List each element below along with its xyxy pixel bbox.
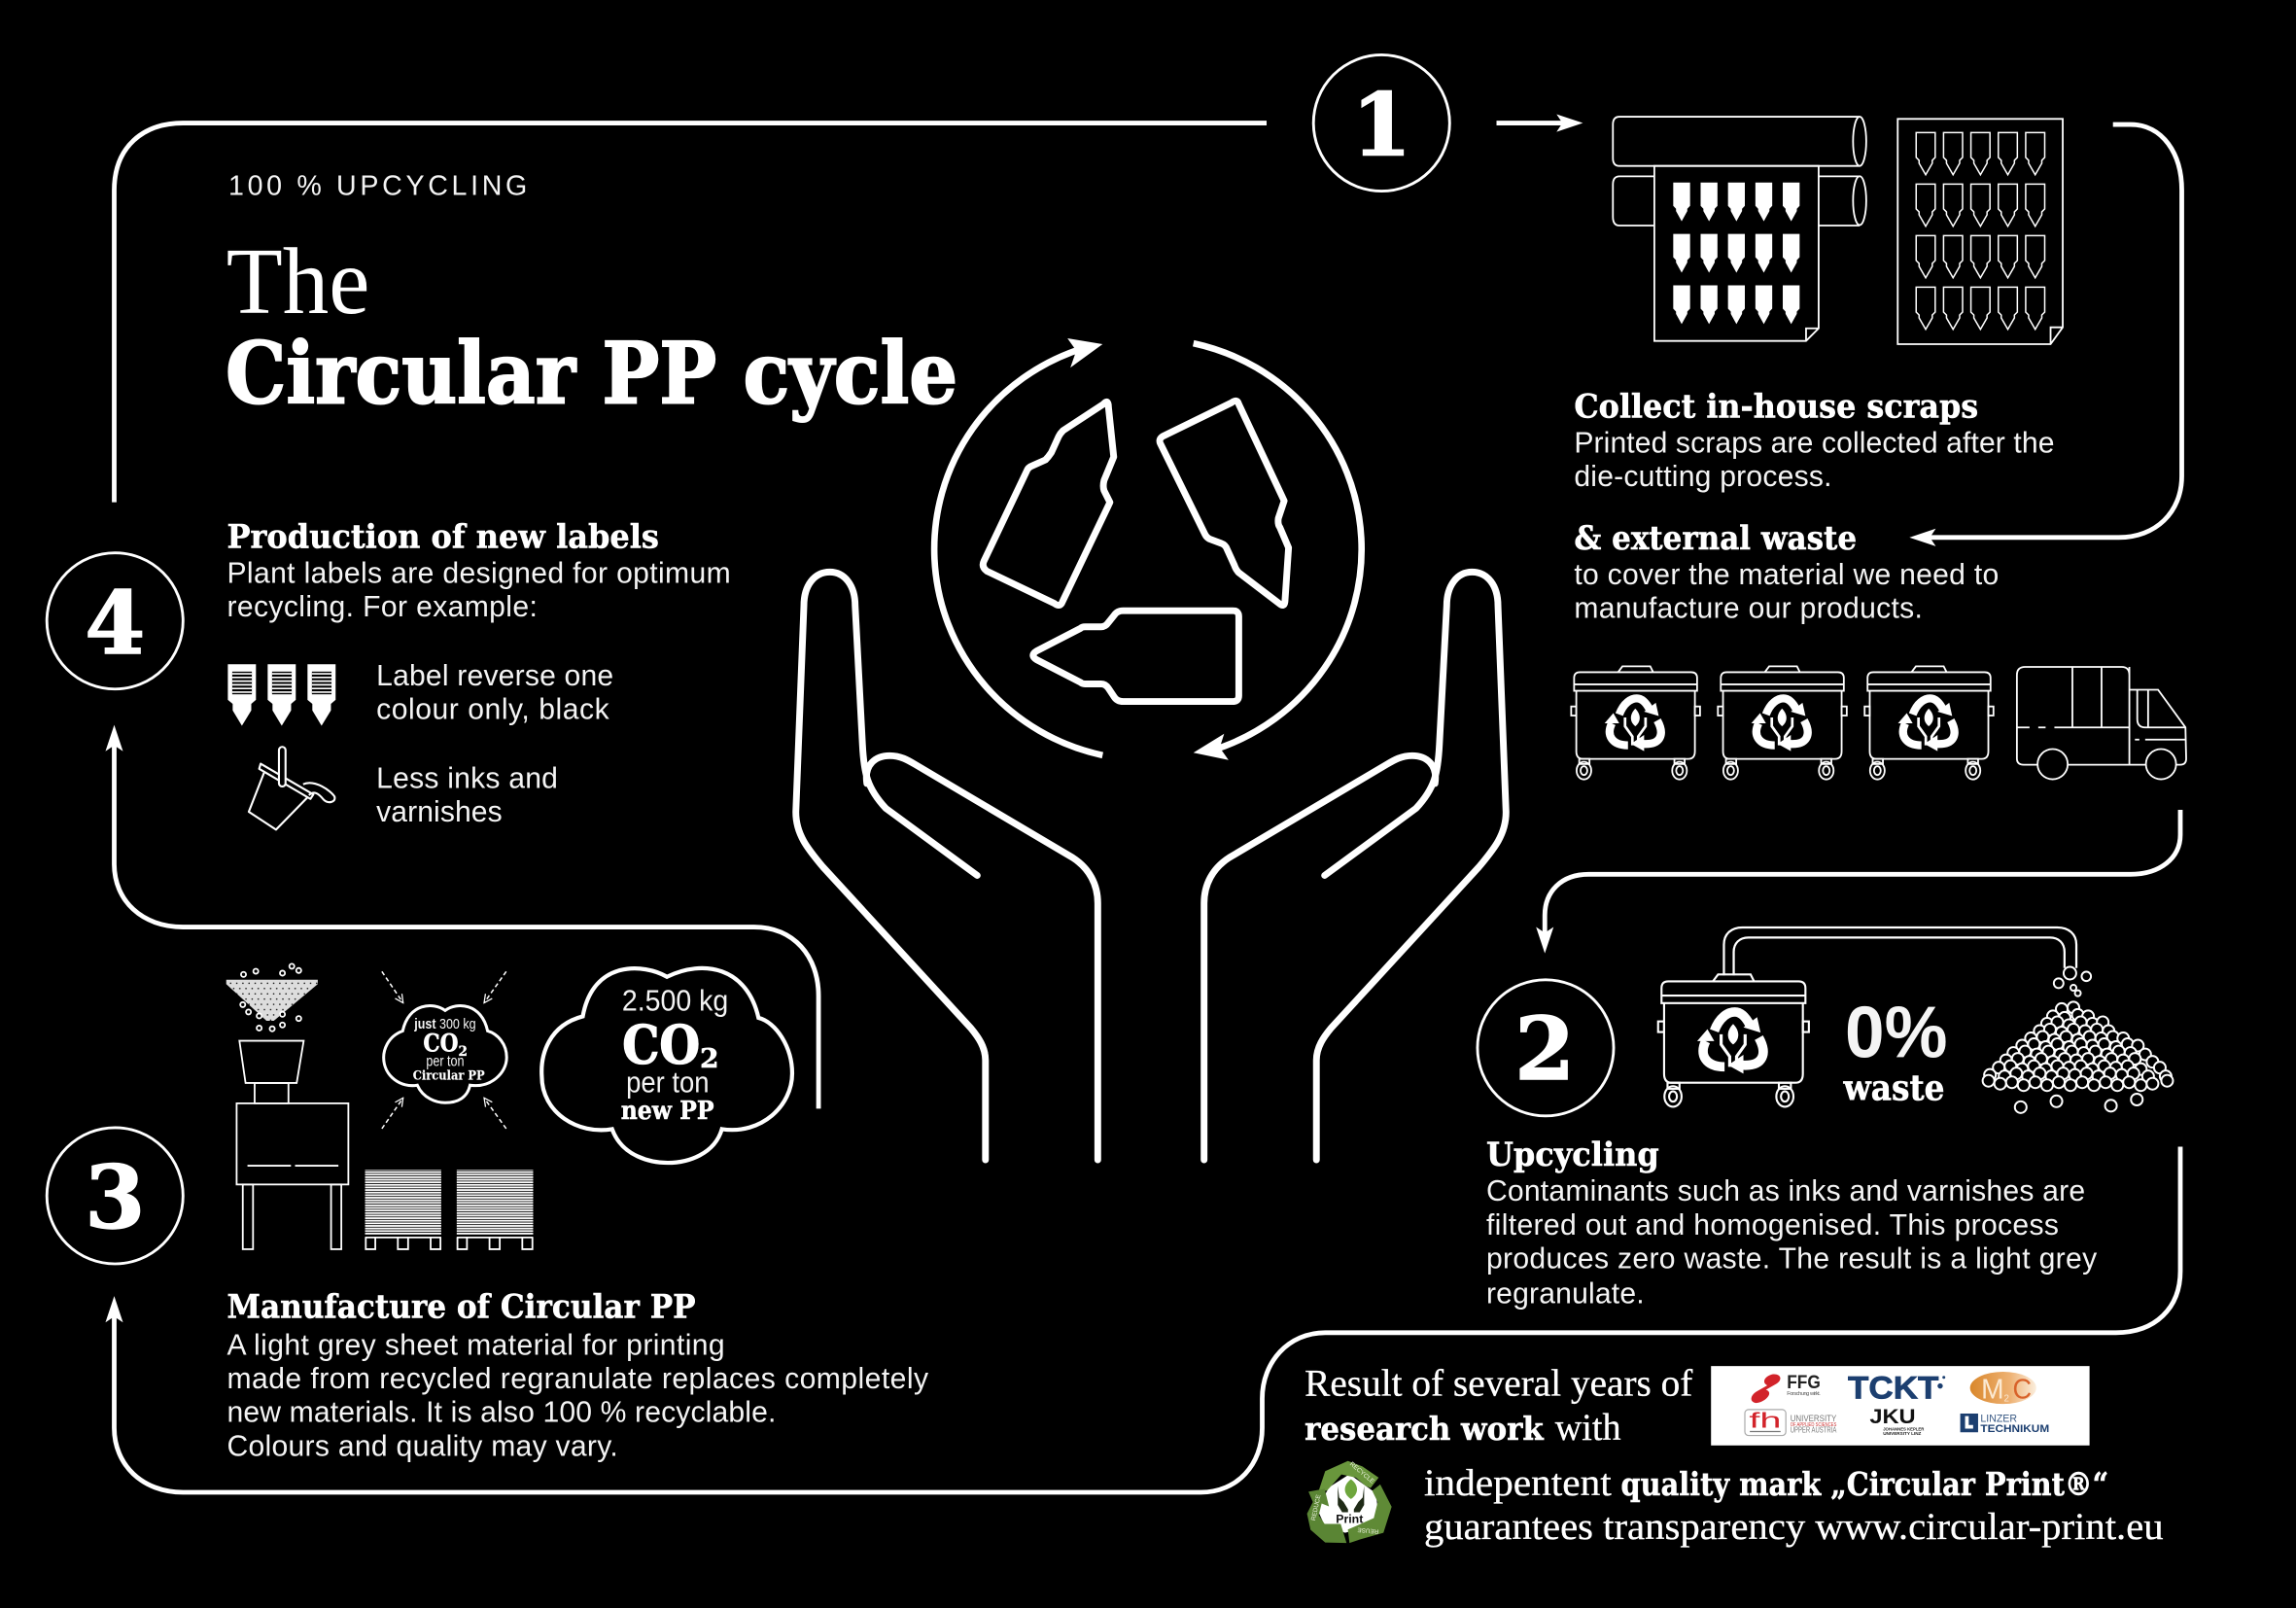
dashed arrows around small cloud [382,971,506,1129]
connector line: waste to 2 [1536,810,2180,954]
connector line: scraps to external waste [1909,124,2182,546]
text: manufacture of circular PP: Colours and quality may vary. [226,1430,618,1462]
text: quality mark: guarantees transparency www.circular-print.eu [1424,1506,2164,1548]
title block [226,170,957,423]
title block: The [226,229,369,334]
logo: FH Upper Austria: UPPER AUSTRIA [1791,1426,1837,1435]
logo: FH Upper Austria: OF APPLIED SCIENCES [1791,1422,1837,1428]
icon: sheet stacks on pallets [365,1170,533,1249]
icon: extrusion machine [236,1041,348,1249]
text: upcycling: Upcycling [1486,1135,1659,1173]
logo: FFG: FFG [1787,1372,1821,1393]
text: upcycling: filtered out and homogenised. This process [1486,1209,2059,1241]
icon: ink bucket [249,747,334,829]
text: production of new labels: recycling. For example: [226,591,538,623]
hands: right [1204,572,1506,1160]
text: collect in-house scraps: Collect in-house scraps [1574,386,1978,425]
text: less inks: Less inks and [376,762,558,794]
text: manufacture of circular PP: new materials. It is also 100 % recyclable. [226,1397,776,1429]
text: production of new labels: Plant labels are designed for optimum [226,558,731,590]
text: research work: research work [1305,1410,1545,1448]
arrow: 1 to scraps [1497,114,1583,132]
title block: 100 % UPCYCLING [228,170,527,201]
small CO2 cloud: just 300 kg [413,1016,476,1032]
step number 3: 3 [85,1146,145,1247]
text: quality mark [1424,1462,2164,1548]
text: less inks [376,762,558,828]
text: external waste: manufacture our products. [1574,593,1923,625]
text: research work: Result of several years of [1305,1363,1693,1405]
icon: black-backed labels [227,664,335,726]
large CO2 cloud: new PP [621,1096,714,1126]
large CO2 cloud: per ton [626,1066,710,1099]
step number 4: 4 [85,573,145,674]
step number 4 [47,553,183,689]
text: label reverse: Label reverse one [376,660,613,692]
connector line: 4 to 1 [114,123,1267,503]
logo: TCKT: TCKT [1848,1370,1939,1405]
logo: Circular Print quality mark: Print [1336,1512,1363,1525]
panel: partner logos [1711,1366,2090,1446]
logo: Circular Print quality mark: RECYCLE [1348,1461,1375,1486]
large CO2 cloud: 2 [700,1044,719,1074]
large CO2 cloud [541,968,792,1163]
logo: JKU: UNIVERSITY LINZ [1883,1431,1921,1437]
text: collect in-house scraps: Printed scraps are collected after the [1574,427,2054,459]
icon: pellets falling into hopper [226,963,318,1031]
text: manufacture of circular PP [226,1287,928,1462]
text: label reverse [376,660,613,726]
small CO2 cloud: CO [423,1030,458,1058]
text: research work [1305,1363,1693,1449]
small CO2 cloud [384,1005,506,1102]
text: upcycling: Contaminants such as inks and varnishes are [1486,1175,2085,1207]
logo: M2C [1970,1372,2036,1405]
central recycling circle with bottle fragments [934,338,1362,760]
text: quality mark: quality mark „Circular Print®“ [1621,1465,2108,1503]
logo: JKU [1869,1406,1925,1437]
logo: FH Upper Austria: fh [1749,1408,1782,1432]
step number 2 [1478,980,1614,1116]
text: production of new labels [226,516,731,623]
zero waste figure: waste [1843,1066,1944,1108]
hands: left [796,572,1097,1160]
zero waste figure [1843,992,1947,1108]
logo: M2C: M [1981,1374,2004,1405]
logo: JKU: JOHANNES KEPLER [1883,1426,1925,1432]
logo: FH Upper Austria: UNIVERSITY [1791,1414,1836,1423]
text: upcycling: regranulate. [1486,1278,1645,1311]
logo: JKU: JKU [1869,1406,1916,1428]
icon: printing rolls with printed sheet [1613,117,1866,341]
icon: truck [2017,667,2186,780]
large CO2 cloud: 2.500 kg [622,985,728,1017]
text: manufacture of circular PP: A light grey sheet material for printing [226,1329,725,1361]
logo: FFG: Forschung wirkt. [1787,1391,1821,1397]
text: manufacture of circular PP: made from recycled regranulate replaces completely [226,1363,928,1395]
small CO2 cloud: per ton [426,1054,465,1070]
logo: M2C: 2 [2003,1394,2009,1405]
text: quality mark: indepentent [1424,1462,1612,1504]
text: label reverse: colour only, black [376,694,610,726]
text: upcycling [1486,1135,2097,1311]
text: research work: with [1555,1407,1621,1449]
zero waste figure: 0% [1845,992,1947,1073]
icon: die-cut sheet with label outlines [1897,119,2063,344]
text: collect in-house scraps [1574,386,2054,493]
icon: waste bins [1571,666,1994,780]
small CO2 cloud: Circular PP [413,1068,485,1083]
logo: FH Upper Austria [1745,1408,1837,1436]
step number 3 [47,1128,183,1264]
icon: regranulate pile [1983,967,2173,1113]
logo: Circular Print quality mark: REDUCE [1310,1493,1323,1521]
small CO2 cloud: 2 [458,1044,468,1060]
text: external waste [1574,518,1999,625]
logo: Linzer Technikum: LINZER [1980,1414,2017,1425]
logo: Circular Print quality mark [1307,1461,1392,1543]
icon: bin with extraction pipe [1658,927,2076,1106]
step number 1: 1 [1351,75,1411,176]
logo: Circular Print quality mark: REUSE [1357,1526,1379,1535]
text: manufacture of circular PP: Manufacture of Circular PP [226,1287,696,1326]
logo: Linzer Technikum: TECHNIKUM [1980,1423,2049,1435]
connector line: 3 to 4 [105,725,818,1108]
logo: FFG [1752,1372,1821,1403]
text: external waste: to cover the material we need to [1574,559,1999,591]
connector line: 2 to 3 [105,1146,2180,1492]
large CO2 cloud: CO [622,1013,700,1075]
text: production of new labels: Production of new labels [226,516,659,555]
text: upcycling: produces zero waste. The result is a light grey [1486,1243,2097,1276]
step number 1 [1313,54,1449,192]
step number 2: 2 [1514,998,1575,1100]
text: less inks: varnishes [376,796,503,828]
text: collect in-house scraps: die-cutting process. [1574,461,1831,493]
title block: Circular PP cycle [226,323,957,423]
text: external waste: & external waste [1574,518,1857,557]
logo: M2C: C [2013,1374,2032,1405]
logo: Linzer Technikum [1961,1414,2049,1435]
